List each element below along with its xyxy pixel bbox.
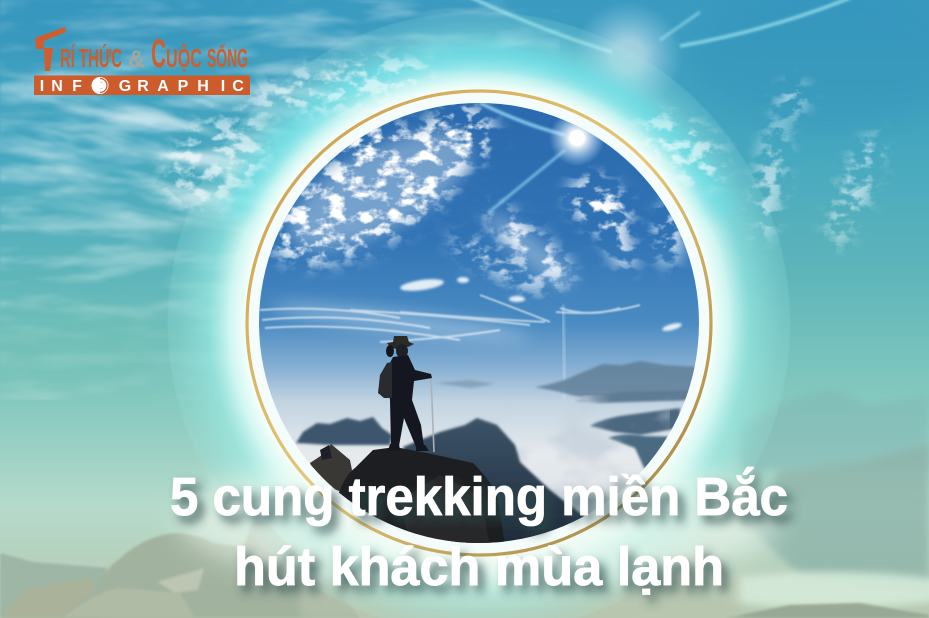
background sun and light rays <box>470 0 850 111</box>
trekking pole <box>431 376 434 452</box>
logo INFOGRAPHIC bar <box>34 76 250 95</box>
sun and lens rays <box>480 103 605 400</box>
mountains left and centre <box>296 417 590 548</box>
logo wordmark: RÍ THỨC <box>60 43 122 73</box>
logo wordmark: & <box>128 46 145 73</box>
logo: Tri Thuc & Cuoc Song Infographic <box>34 27 250 95</box>
trekker silhouette <box>378 336 432 451</box>
distant mountains right <box>435 361 700 470</box>
title: hút khách mùa lạnh <box>234 537 724 597</box>
high clouds <box>251 98 680 300</box>
glow halo around the circle <box>167 11 791 618</box>
circular photo frame: gold ring and white band <box>247 91 711 565</box>
faded cloud patches around the ring <box>143 45 893 253</box>
background: faded mountains and rocks <box>0 389 929 618</box>
logo T mark <box>35 27 66 71</box>
title: 5 cung trekking miền Bắc <box>170 467 788 527</box>
logo wordmark: SỐNG <box>207 43 248 73</box>
soft cloud haze <box>270 108 580 348</box>
logo wordmark: C <box>151 32 166 76</box>
photo: trekker on summit <box>250 98 710 565</box>
logo wordmark <box>60 32 248 76</box>
logo O disc <box>92 77 108 94</box>
small cloud puffs <box>400 277 682 332</box>
summit rocks <box>310 444 504 543</box>
sky <box>250 100 710 550</box>
stringy low cloud wisps <box>260 295 640 342</box>
logo: Tri Thuc & Cuoc Song Infographic: INFOGRAPHIC <box>40 78 244 95</box>
title <box>170 467 788 597</box>
mist below the circle <box>179 450 779 590</box>
sea of clouds shading <box>518 395 670 508</box>
cyan glow arc above the ring <box>236 57 722 215</box>
logo wordmark: UỘC <box>166 43 202 73</box>
